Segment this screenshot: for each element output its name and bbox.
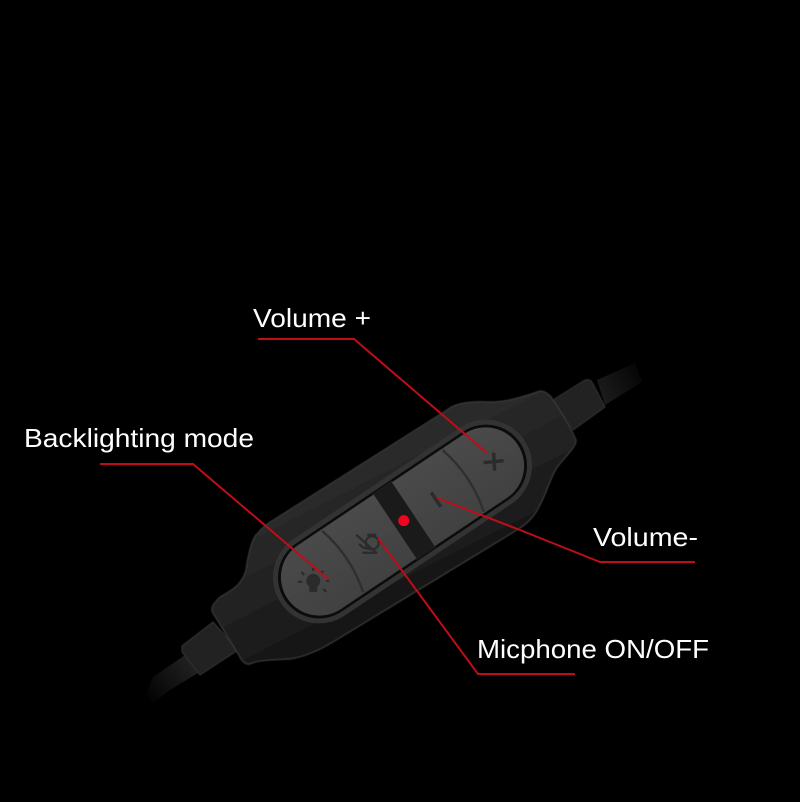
leader line	[437, 498, 695, 562]
callout: Micphone ON/OFF	[378, 538, 709, 674]
left button: backlight and microphone	[266, 495, 416, 631]
strain relief socket: upper right	[553, 380, 605, 430]
leader line	[258, 339, 487, 453]
callout: Backlighting mode	[24, 423, 328, 579]
icon: minus	[431, 493, 441, 507]
button ridge: right	[443, 447, 488, 512]
callout: Volume-	[437, 498, 698, 562]
button ridge: left	[322, 528, 367, 592]
callout: Volume +	[253, 303, 487, 453]
LED band	[372, 480, 436, 560]
icon: light bulb	[298, 568, 329, 592]
leader line	[378, 538, 575, 674]
label: Backlighting mode	[24, 423, 254, 453]
inline remote control	[146, 363, 642, 703]
panel recess	[262, 409, 543, 634]
remote body	[212, 391, 576, 664]
control panel, rotated along the body axis	[255, 402, 550, 641]
right button: volume	[392, 412, 539, 546]
icon: plus	[484, 453, 504, 471]
cable: upper right	[597, 363, 642, 405]
label: Volume-	[593, 522, 698, 552]
strain relief socket: lower left	[182, 622, 238, 675]
label: Volume +	[253, 303, 371, 333]
LED indicator	[396, 513, 411, 528]
leader line	[100, 464, 328, 579]
icon: muted microphone	[356, 535, 379, 553]
cable: lower left	[146, 655, 198, 703]
label: Micphone ON/OFF	[477, 634, 709, 664]
panel ring	[255, 402, 550, 641]
